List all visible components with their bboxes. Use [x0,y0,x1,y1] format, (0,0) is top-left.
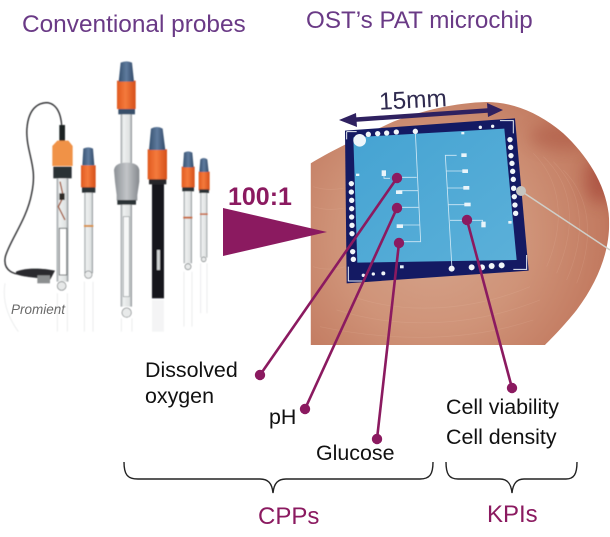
bracket: KPIs [446,462,577,493]
probe 6 [199,158,210,262]
probe 2 [81,147,96,278]
label: pH: pH [269,405,296,429]
heading: OST's PAT microchip: OST’s PAT microchip [306,7,533,34]
callout line: dissolved oxygen [255,173,402,380]
photo: microchip on fingertip [300,93,610,353]
bracket: CPPs [124,462,433,493]
probe 3 [114,61,139,317]
label: Promient: Promient [11,302,66,317]
heading: conventional probes: Conventional probes [22,11,246,38]
label: dissolved oxygen: oxygen [145,384,214,408]
dimension arrow: 15mm [339,103,503,127]
label: glucose: Glucose [316,441,394,465]
chip contact pads [349,125,518,277]
callout line: glucose [372,238,404,444]
probe 5 [182,151,195,270]
probe 4 [148,127,167,298]
dimension label: 15mm: 15mm [378,85,447,116]
probe reflections [4,263,207,332]
label: dissolved oxygen: Dissolved [145,358,238,382]
chip [345,118,529,283]
callout line: pH [300,203,402,414]
category label: KPIs: KPIs [487,501,538,528]
chip sensor pads [356,132,512,268]
photo: conventional probes [4,61,210,332]
label: cell viability and density: Cell viability [446,395,559,419]
arrow: scale-down triangle [223,208,327,256]
label: cell viability and density: Cell density [446,425,557,449]
probe 1 with cable [5,103,73,290]
category label: CPPs: CPPs [258,503,319,530]
ratio: 100:1: 100:1 [228,183,292,211]
callout line: cell viability and density [462,215,517,393]
wire: grey connector [516,186,610,250]
chip traces [384,132,483,268]
fingertip [300,93,610,353]
